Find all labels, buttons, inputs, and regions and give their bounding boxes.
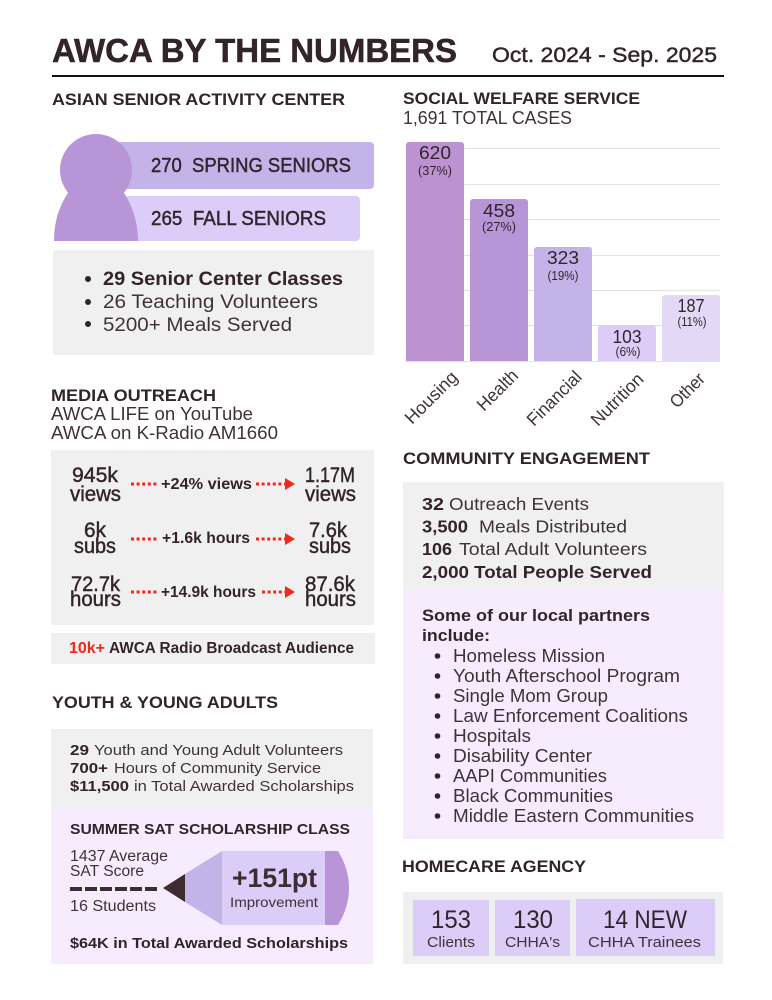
engagement stats: 2,000 Total People Served: [422, 562, 652, 582]
engagement stats: Total Adult Volunteers: [459, 539, 647, 559]
bar chart: [401, 142, 720, 430]
partners intro line two: include:: [422, 626, 490, 645]
senior center stats: 29 Senior Center Classes: [103, 269, 343, 290]
sat score text: 1437 Average: [70, 848, 168, 865]
panel: social welfare service: [401, 89, 720, 430]
youth stats: $11,500: [70, 778, 129, 795]
stat: new trainees: CHHA Trainees: [588, 934, 701, 951]
bar: nutrition: 103: [612, 327, 642, 347]
bar: fall seniors: 265 FALL SENIORS: [151, 208, 326, 230]
youth stats: Hours of Community Service: [114, 760, 321, 777]
bar: health: (27%): [482, 219, 516, 234]
local partners: [403, 589, 724, 839]
students: 16 Students: [70, 898, 156, 915]
title: AWCA BY THE NUMBERS: [52, 32, 457, 69]
row: views: views: [70, 483, 121, 506]
icon: pencil: [163, 851, 349, 925]
partner list: Law Enforcement Coalitions: [453, 706, 688, 726]
row: hours: +14.9k hours: [161, 584, 256, 601]
icon: person: [54, 134, 138, 241]
stat: chha: [495, 900, 570, 956]
category labels: Financial: [523, 367, 586, 430]
engagement stats: Meals Distributed: [479, 516, 627, 536]
stat: clients: 153: [431, 906, 471, 934]
row: views: views: [305, 483, 356, 506]
subheading: radio: AWCA on K-Radio AM1660: [51, 423, 278, 443]
panel: community engagement: [403, 449, 724, 839]
youth stats: Youth and Young Adult Volunteers: [94, 742, 343, 759]
heading: ASIAN SENIOR ACTIVITY CENTER: [52, 90, 345, 109]
youth stats: in Total Awarded Scholarships: [134, 778, 354, 795]
row: subs: subs: [309, 535, 351, 558]
senior center stats: 5200+ Meals Served: [103, 315, 292, 336]
header: [52, 32, 724, 77]
row: views: [70, 464, 356, 506]
row: subs: +1.6k hours: [162, 530, 250, 547]
callout: radio audience: [51, 633, 375, 664]
partner list: AAPI Communities: [453, 766, 607, 786]
category labels: Health: [473, 365, 522, 415]
bar: health: [470, 199, 528, 361]
icon: pencil: +151pt: [232, 863, 317, 893]
bar: spring seniors: 270 SPRING SENIORS: [151, 155, 351, 177]
youth stats: 700+: [70, 760, 108, 777]
subheading: 1,691 TOTAL CASES: [403, 108, 572, 128]
partner list: Youth Afterschool Program: [453, 666, 680, 686]
callout: radio audience: 10k+: [69, 640, 105, 657]
youth stats: 29: [70, 742, 89, 759]
row: subs: 7.6k: [309, 519, 347, 542]
icon: pencil: Improvement: [230, 894, 318, 910]
engagement stats: 106: [422, 539, 452, 559]
sat scholarship class: [51, 807, 373, 964]
bar: other: (11%): [678, 314, 706, 329]
partner list: Hospitals: [453, 726, 531, 746]
bar: housing: (37%): [418, 163, 452, 178]
stat: clients: [413, 900, 489, 956]
partner list: Middle Eastern Communities: [453, 806, 694, 826]
row: hours: [70, 573, 356, 611]
stat: new trainees: 14 NEW: [603, 906, 687, 934]
heading: MEDIA OUTREACH: [51, 386, 216, 405]
bar: nutrition: [598, 325, 656, 361]
senior center stats: 26 Teaching Volunteers: [103, 292, 318, 313]
partner list: Disability Center: [453, 746, 592, 766]
row: hours: hours: [70, 588, 121, 611]
row: views: 945k: [72, 464, 118, 487]
partner list: Black Communities: [453, 786, 613, 806]
bar: fall seniors: [100, 196, 360, 241]
row: views: +24% views: [161, 476, 252, 493]
bar: other: [662, 295, 720, 361]
sat score label: SAT Score: [70, 863, 144, 880]
row: hours: 72.7k: [71, 573, 120, 596]
stat: chha: 130: [513, 906, 553, 934]
stat: new trainees: [576, 899, 715, 956]
partner list: [435, 646, 694, 826]
sat heading: SUMMER SAT SCHOLARSHIP CLASS: [70, 821, 350, 838]
row: views: 1.17M: [305, 464, 355, 487]
engagement stats: [403, 482, 724, 589]
bar: housing: [406, 142, 464, 361]
stat: chha: CHHA's: [505, 934, 560, 951]
bar: housing: 620: [419, 143, 451, 163]
bar: other: 187: [678, 296, 704, 316]
row: subs: subs: [74, 535, 116, 558]
date range: Oct. 2024 - Sep. 2025: [492, 44, 717, 67]
stat: clients: Clients: [427, 934, 475, 951]
bar: financial: [534, 247, 592, 361]
senior center stats: [53, 250, 374, 355]
total scholarships: $64K in Total Awarded Scholarships: [70, 935, 348, 952]
callout: radio audience: AWCA Radio Broadcast Audience: [109, 640, 354, 657]
partner list: Single Mom Group: [453, 686, 608, 706]
panel: asian senior activity center: [52, 90, 374, 355]
youth stats: [51, 729, 373, 807]
row: hours: 87.6k: [305, 573, 355, 596]
heading: HOMECARE AGENCY: [402, 857, 587, 876]
category labels: [401, 365, 709, 430]
partner list: Homeless Mission: [453, 646, 605, 666]
bar: financial: 323: [547, 248, 579, 268]
engagement stats: 32: [422, 494, 444, 514]
heading: YOUTH & YOUNG ADULTS: [52, 693, 278, 712]
bar: spring seniors: [100, 142, 374, 189]
panel: homecare agency: [402, 857, 723, 964]
heading: SOCIAL WELFARE SERVICE: [403, 89, 640, 108]
engagement stats: 3,500: [422, 516, 468, 536]
bar: nutrition: (6%): [616, 344, 640, 359]
subheading: youtube: AWCA LIFE on YouTube: [51, 404, 253, 424]
category labels: Housing: [401, 367, 461, 428]
engagement stats: Outreach Events: [449, 494, 589, 514]
row: subs: 6k: [84, 519, 106, 542]
row: subs: [74, 519, 351, 558]
bar: health: 458: [483, 201, 515, 221]
category labels: Nutrition: [587, 369, 647, 430]
row: hours: hours: [305, 588, 356, 611]
bar: financial: (19%): [548, 268, 578, 283]
partners intro: Some of our local partners: [422, 606, 650, 625]
panel: media outreach: [51, 386, 375, 664]
pencil line: [70, 887, 157, 891]
heading: COMMUNITY ENGAGEMENT: [403, 449, 651, 468]
category labels: Other: [666, 369, 709, 412]
growth stats: [51, 450, 374, 625]
panel: youth and young adults: [51, 693, 373, 964]
